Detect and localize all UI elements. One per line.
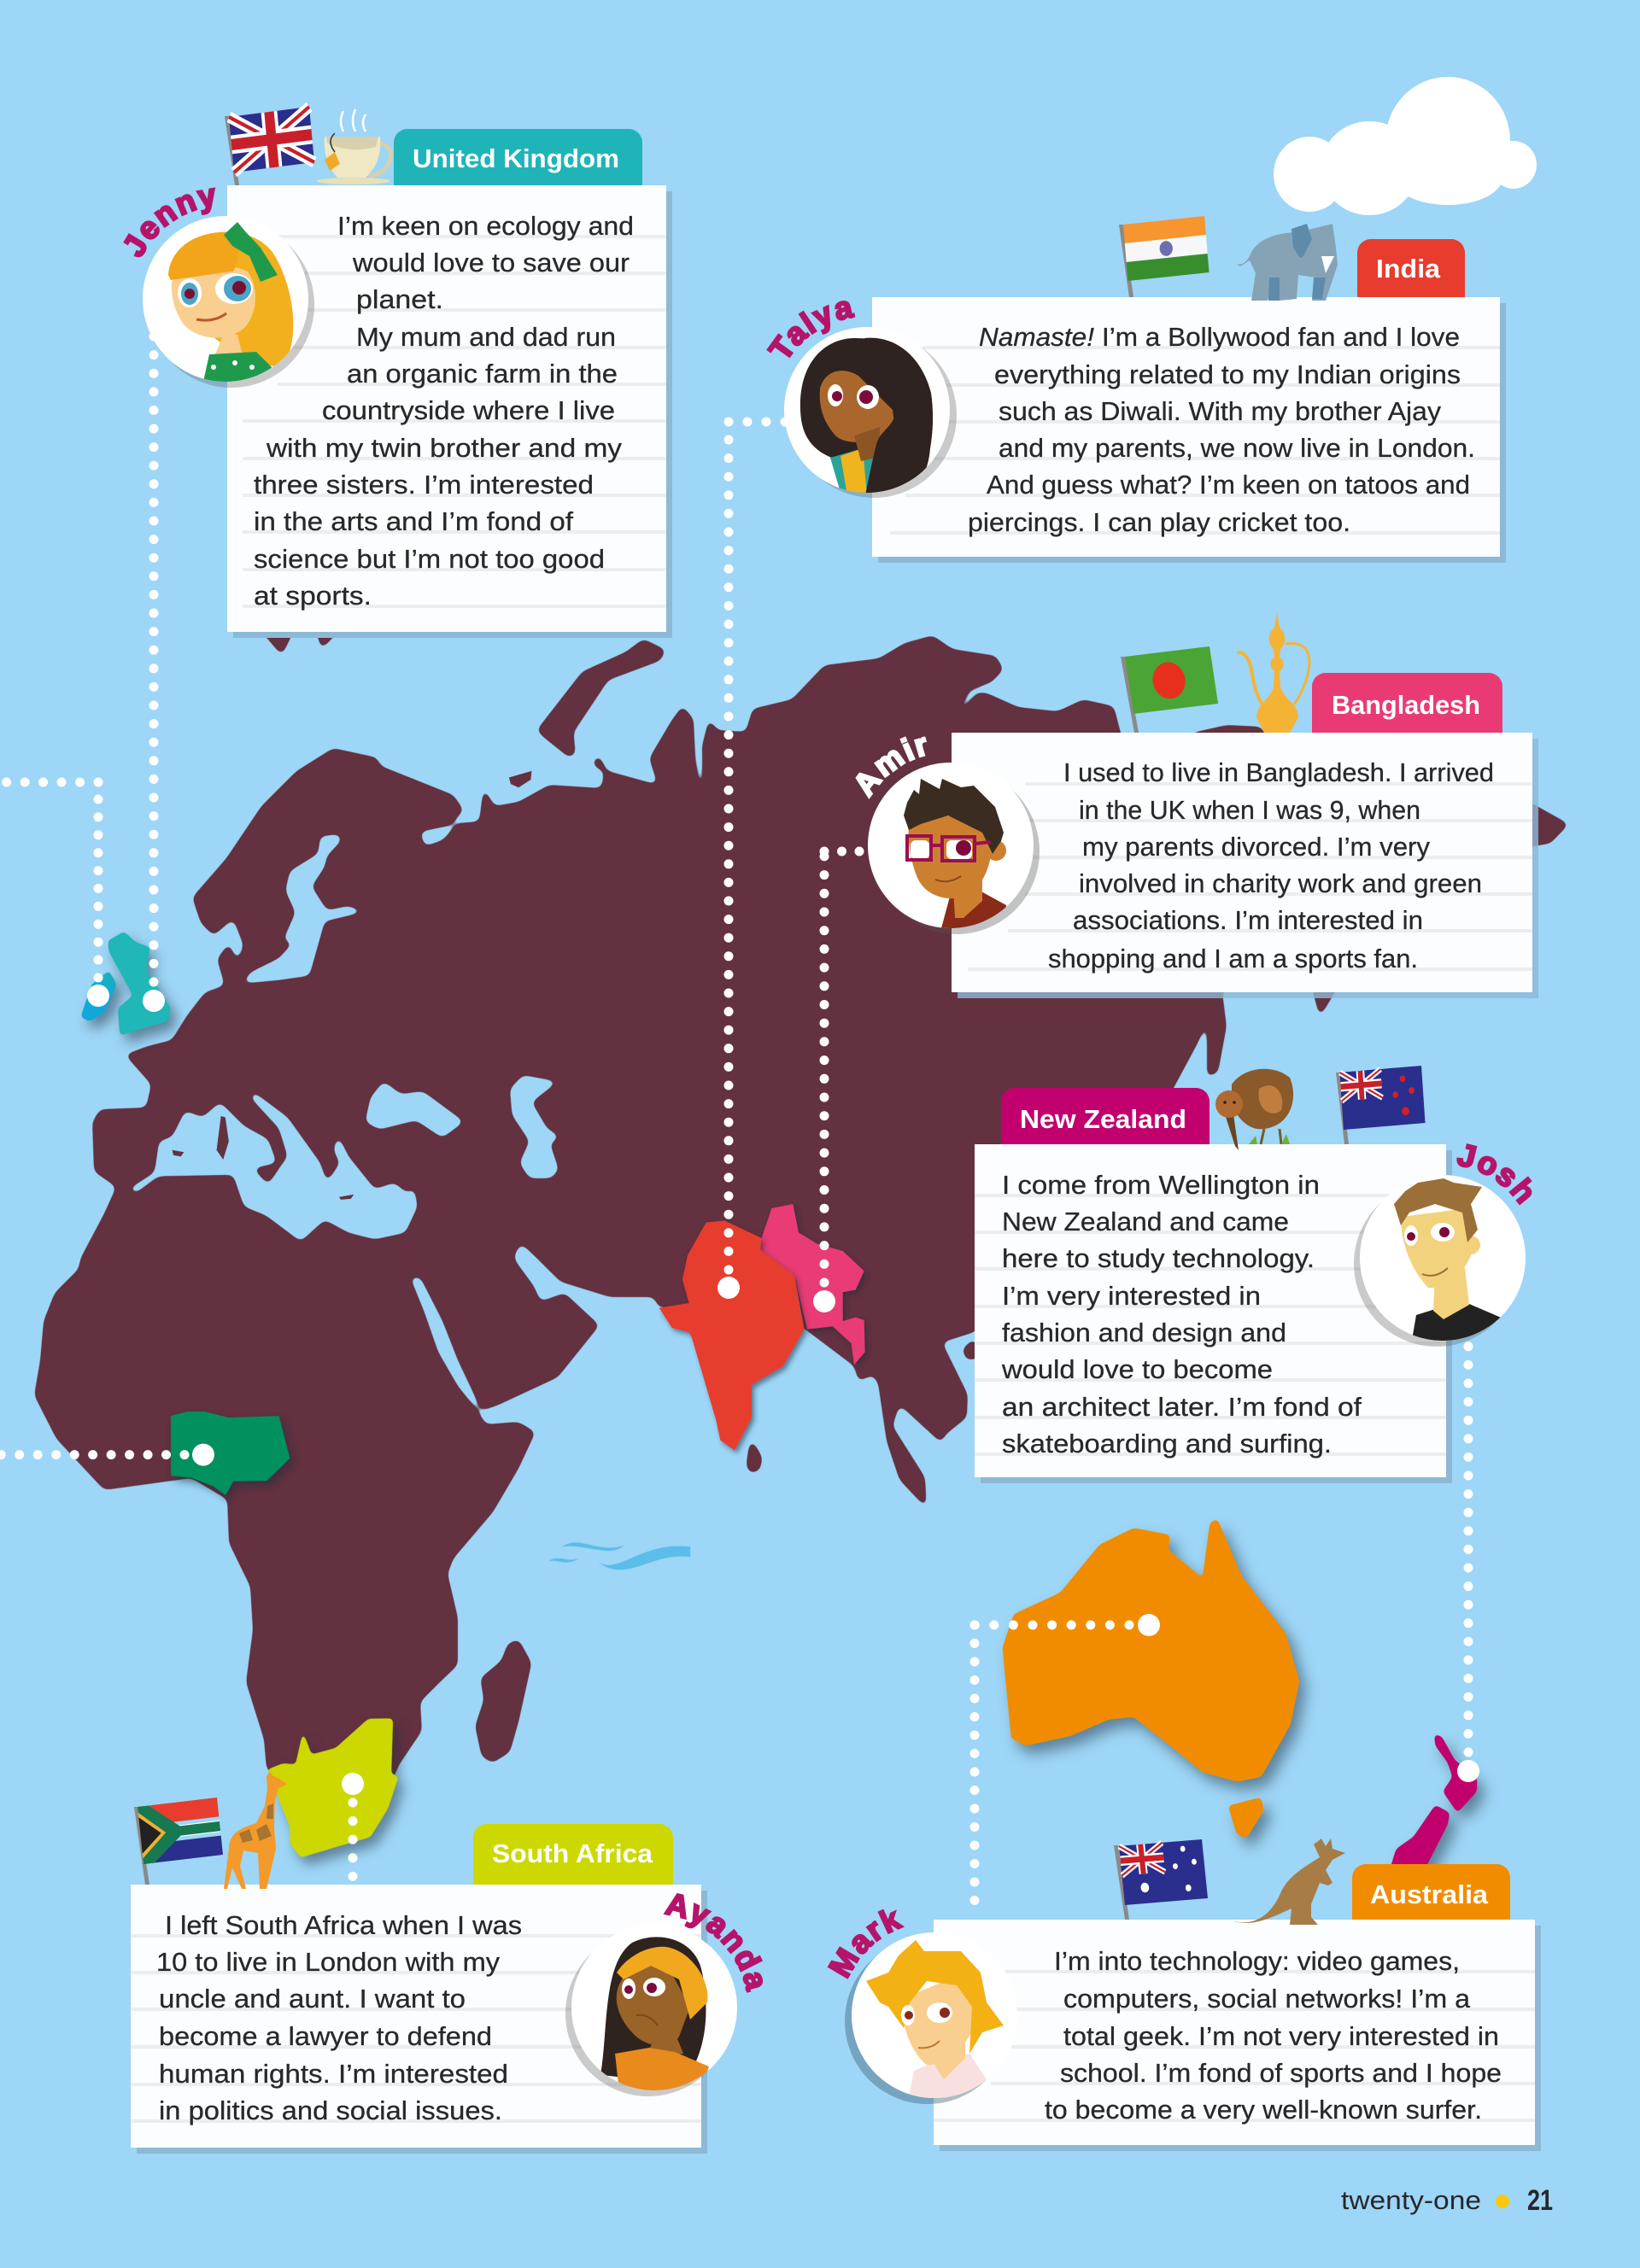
name: Amir: Amir — [856, 736, 927, 799]
text block: Josh: fashion and design and — [1002, 1318, 1286, 1347]
note card — [975, 1144, 1452, 1483]
world map — [34, 628, 1569, 1793]
flag: India — [1119, 216, 1210, 297]
panel: Mark, Australia — [827, 1838, 1541, 2151]
text block: Josh — [1001, 1170, 1362, 1458]
avatar: Mark — [845, 1932, 1017, 2104]
flag: Bangladesh — [1121, 646, 1218, 733]
text block: Mark: total geek. I’m not very interested in — [1063, 2021, 1499, 2051]
text block: Jenny: at sports. — [254, 581, 372, 611]
text block: Josh: here to study technology. — [1002, 1243, 1315, 1273]
note card — [131, 1885, 707, 2154]
icon: giraffe — [224, 1772, 287, 1889]
avatar: Ayanda — [565, 1925, 737, 2096]
text block: Ayanda: uncle and aunt. I want to — [159, 1984, 466, 2014]
panel: Ayanda, South Africa — [131, 1772, 764, 2154]
text block: Mark: school. I’m fond of sports and I hope — [1060, 2058, 1502, 2088]
text block: Talya: everything related to my Indian origins — [994, 359, 1461, 389]
tab: Bangladesh: Bangladesh — [1332, 690, 1480, 720]
text block: Talya: And guess what? I’m keen on tatoos and — [987, 470, 1470, 500]
text block: Amir: involved in charity work and green — [1079, 868, 1482, 898]
tab: United Kingdom: United Kingdom — [413, 143, 619, 173]
text block: Amir: shopping and I am a sports fan. — [1048, 944, 1418, 973]
icon: teacup — [317, 109, 391, 184]
text block: Jenny — [254, 211, 634, 611]
seas: Baltic, Mediterranean, Black Sea, Caspian — [129, 834, 560, 1242]
text block: Ayanda: in politics and social issues. — [159, 2096, 502, 2125]
country: United Kingdom — [108, 932, 171, 1036]
text block: Talya: piercings. I can play cricket too. — [968, 507, 1350, 537]
text block: Ayanda — [156, 1910, 522, 2125]
panel: Amir, Bangladesh — [856, 612, 1538, 998]
country: Nigeria — [171, 1412, 290, 1495]
tab: New Zealand — [1001, 1088, 1210, 1161]
tab: New Zealand: New Zealand — [1020, 1104, 1186, 1134]
flag: Australia — [1114, 1839, 1208, 1920]
name: Mark: Mark — [827, 1909, 905, 1979]
text block: Amir: in the UK when I was 9, when — [1079, 795, 1420, 825]
name: Ayanda: Ayanda — [663, 1892, 764, 1993]
avatar: Jenny — [143, 216, 314, 388]
tab: Bangladesh — [1312, 673, 1502, 750]
tab: India — [1357, 239, 1465, 314]
country: South Africa — [266, 1718, 399, 1858]
tab: South Africa — [473, 1824, 673, 1901]
text block: Jenny: three sisters. I’m interested — [254, 470, 594, 500]
text block: Ayanda: human rights. I’m interested — [159, 2059, 508, 2089]
dotted connector lines — [0, 324, 1468, 1919]
location markers — [87, 985, 1479, 1795]
avatar: Talya — [784, 327, 957, 498]
text block: Josh: New Zealand and came — [1002, 1207, 1289, 1236]
name: Talya: Talya — [766, 301, 856, 359]
text block: Jenny: I’m keen on ecology and — [337, 211, 634, 241]
flag: United Kingdom — [225, 107, 314, 185]
text block: Talya: Namaste! — [979, 322, 1094, 352]
name: Jenny: Jenny — [123, 187, 215, 258]
panel: Jenny, United Kingdom — [123, 102, 672, 638]
text block: Jenny: an organic farm in the — [347, 359, 618, 389]
tab: South Africa: South Africa — [492, 1838, 653, 1868]
text block: Jenny: with my twin brother and my — [266, 433, 623, 463]
text block: Jenny: My mum and dad run — [356, 322, 616, 352]
text block: Mark: computers, social networks! I’m a — [1063, 1984, 1471, 2014]
country: Australia — [1003, 1518, 1299, 1838]
text block: Talya — [968, 322, 1475, 537]
country: India — [659, 1220, 805, 1450]
country: Bangladesh — [760, 1204, 865, 1365]
text block: Jenny: in the arts and I’m fond of — [254, 506, 573, 536]
text block: Amir: my parents divorced. I’m very — [1082, 832, 1430, 862]
text block: Amir: associations. I’m interested in — [1073, 905, 1423, 935]
text block: Mark: to become a very well-known surfer. — [1045, 2095, 1482, 2125]
text block: Jenny: would love to save our — [352, 248, 630, 278]
note card — [227, 185, 672, 638]
avatar: Josh — [1354, 1175, 1526, 1347]
text block: Josh: would love to become — [1001, 1354, 1273, 1384]
note card — [952, 733, 1538, 998]
page footer: 21 — [1527, 2184, 1553, 2217]
country: New Zealand — [1389, 1733, 1477, 1873]
text block: Josh: I come from Wellington in — [1002, 1170, 1320, 1200]
note card — [872, 297, 1506, 563]
icon: golden jug — [1237, 612, 1309, 733]
text block: Talya: such as Diwali. With my brother Ajay — [999, 396, 1442, 426]
tab: Australia: Australia — [1370, 1879, 1489, 1909]
text block: Jenny: planet. — [356, 284, 443, 314]
text block: Talya: and my parents, we now live in London. — [999, 433, 1475, 463]
text block: Amir: I used to live in Bangladesh. I arrived — [1063, 757, 1494, 787]
text block: Mark — [1045, 1946, 1502, 2125]
note card — [934, 1920, 1541, 2151]
icon: kiwi bird — [1215, 1069, 1293, 1150]
panel: Talya, India — [766, 216, 1506, 563]
avatar: Amir — [868, 763, 1040, 934]
tab: India: India — [1376, 254, 1441, 284]
icon: elephant — [1236, 224, 1338, 301]
sea waves — [548, 1542, 690, 1569]
tab: United Kingdom — [394, 129, 642, 202]
country: Ireland — [80, 971, 117, 1021]
text block: Ayanda: 10 to live in London with my — [156, 1947, 501, 1977]
icon: kangaroo — [1232, 1838, 1345, 1925]
flag: South Africa — [134, 1797, 223, 1885]
text block: Jenny: countryside where I live — [322, 395, 615, 425]
text block: Ayanda: I left South Africa when I was — [165, 1910, 522, 1940]
islands — [173, 628, 1341, 1763]
text block: Josh: an architect later. I’m fond of — [1002, 1392, 1362, 1422]
tab: Australia — [1352, 1864, 1510, 1937]
page footer: twenty-one — [1341, 2185, 1481, 2215]
text block: Josh: I’m very interested in — [1002, 1281, 1261, 1311]
text block: Josh: skateboarding and surfing. — [1002, 1429, 1332, 1458]
text block: Amir — [1048, 757, 1494, 973]
text block: Talya: I’m a Bollywood fan and I love — [1102, 322, 1460, 352]
text block: Jenny: science but I’m not too good — [254, 544, 605, 574]
text block: Mark: I’m into technology: video games, — [1054, 1946, 1460, 1976]
page footer — [1341, 2184, 1553, 2217]
panel: Josh, New Zealand — [975, 1066, 1532, 1483]
land mass: Eurasia and Africa — [34, 635, 1569, 1793]
text block: Ayanda: become a lawyer to defend — [159, 2021, 492, 2051]
flag: New Zealand — [1336, 1066, 1425, 1144]
cloud — [1274, 77, 1537, 215]
name: Josh: Josh — [1456, 1143, 1532, 1206]
